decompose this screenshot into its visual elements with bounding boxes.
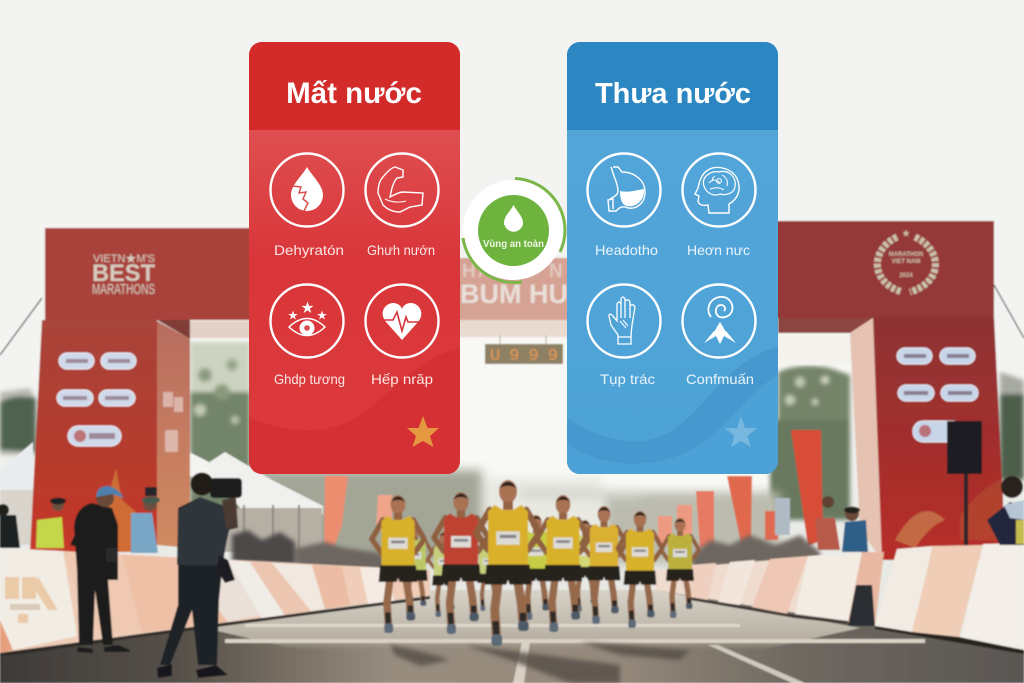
crowd left and right bbox=[232, 530, 820, 572]
photographer foreground bbox=[157, 472, 242, 678]
logo: Vietnam's Best Marathons: BEST bbox=[92, 260, 155, 287]
barrier logo bbox=[5, 577, 58, 623]
panel: Thưa nước (overhydration) bbox=[567, 42, 778, 474]
background trees bbox=[190, 342, 850, 520]
center beam with event name: HA bbox=[462, 261, 493, 282]
red panel header bbox=[249, 42, 460, 130]
label: Heơn nưc bbox=[687, 242, 750, 258]
label: Confmuấn bbox=[686, 371, 754, 387]
background runners bbox=[398, 515, 602, 620]
panel wave decoration bbox=[249, 348, 460, 474]
center beam with event name: BUM HU bbox=[460, 279, 568, 309]
race timer bbox=[485, 335, 563, 366]
icon: eye with stars bbox=[270, 284, 344, 358]
logo: Vietnam's Best Marathons bbox=[92, 253, 155, 298]
heading: Thưa nước bbox=[595, 78, 751, 110]
road markings bbox=[225, 624, 925, 683]
safe zone badge: Vùng an toàn bbox=[463, 178, 565, 283]
label: Ghdp tương bbox=[274, 371, 345, 387]
label: Dehyratón bbox=[274, 242, 344, 258]
panel: Mất nước (dehydration) bbox=[249, 42, 460, 474]
center beam with event name: N bbox=[549, 261, 563, 282]
spectators left bbox=[0, 487, 160, 553]
blue panel header bbox=[567, 42, 778, 130]
event banners bbox=[324, 430, 823, 556]
foreground runners bbox=[372, 480, 699, 646]
icon: stomach bbox=[588, 154, 660, 226]
sponsor badges left bbox=[57, 353, 136, 446]
heading: Mất nước bbox=[286, 77, 422, 110]
right gantry: VIET NAM bbox=[892, 259, 920, 265]
right gantry: 2024 bbox=[899, 273, 913, 279]
label: Hếp nrăp bbox=[371, 371, 433, 387]
road bbox=[0, 590, 1024, 683]
icon: spiral and arrows bbox=[682, 284, 756, 358]
right gantry: MARATHON bbox=[889, 252, 923, 258]
icon: flexed arm muscle bbox=[366, 154, 438, 226]
logo: Vietnam's Best Marathons: MARATHONS bbox=[92, 281, 155, 298]
label: Ghưh nướn bbox=[367, 242, 435, 258]
runner shadows bbox=[390, 642, 690, 683]
pillar artwork bbox=[100, 468, 145, 552]
center beam with event name bbox=[455, 258, 573, 337]
photographer with blue cap bbox=[70, 486, 130, 653]
left tents bbox=[0, 442, 323, 552]
distant hills and left tree line bbox=[0, 372, 1024, 480]
label: Headotho bbox=[595, 242, 658, 258]
right gantry bbox=[770, 221, 1004, 560]
sponsor badges right bbox=[897, 348, 978, 442]
logo: Vietnam's Best Marathons: VIETN★M'S bbox=[93, 253, 155, 265]
icon: pale blue star bbox=[725, 416, 757, 447]
guy wires bbox=[0, 285, 1024, 355]
green circle bbox=[478, 195, 549, 266]
right gantry: ★ bbox=[902, 229, 910, 238]
icon: hand bbox=[588, 284, 660, 358]
panel wave decoration bbox=[567, 347, 778, 474]
icon: eye with stars: ★ bbox=[288, 311, 298, 322]
icon: head with brain bbox=[682, 154, 756, 226]
label: Tụp trác bbox=[600, 371, 655, 387]
icon: eye with stars: ★ bbox=[301, 300, 314, 315]
right barrier panels bbox=[655, 543, 1024, 654]
icon: cracked water drop bbox=[270, 154, 344, 226]
icon: heart with pulse bbox=[366, 284, 438, 358]
laurel wreath logo bbox=[877, 237, 935, 292]
icon: eye with stars: ★ bbox=[317, 311, 327, 322]
left barrier panels bbox=[0, 548, 430, 656]
progress ring bbox=[515, 178, 565, 252]
speaker on pole bbox=[947, 421, 982, 546]
race timer: U999 bbox=[490, 347, 558, 366]
badge label: Vùng an toàn bbox=[483, 239, 544, 250]
icon: safe water drop bbox=[504, 205, 523, 232]
icon: gold star bbox=[407, 416, 439, 447]
spectators right bbox=[815, 476, 1024, 552]
hazy trees behind runners bbox=[250, 470, 780, 564]
left gantry bbox=[30, 228, 255, 552]
glow behind finish bbox=[190, 338, 850, 518]
